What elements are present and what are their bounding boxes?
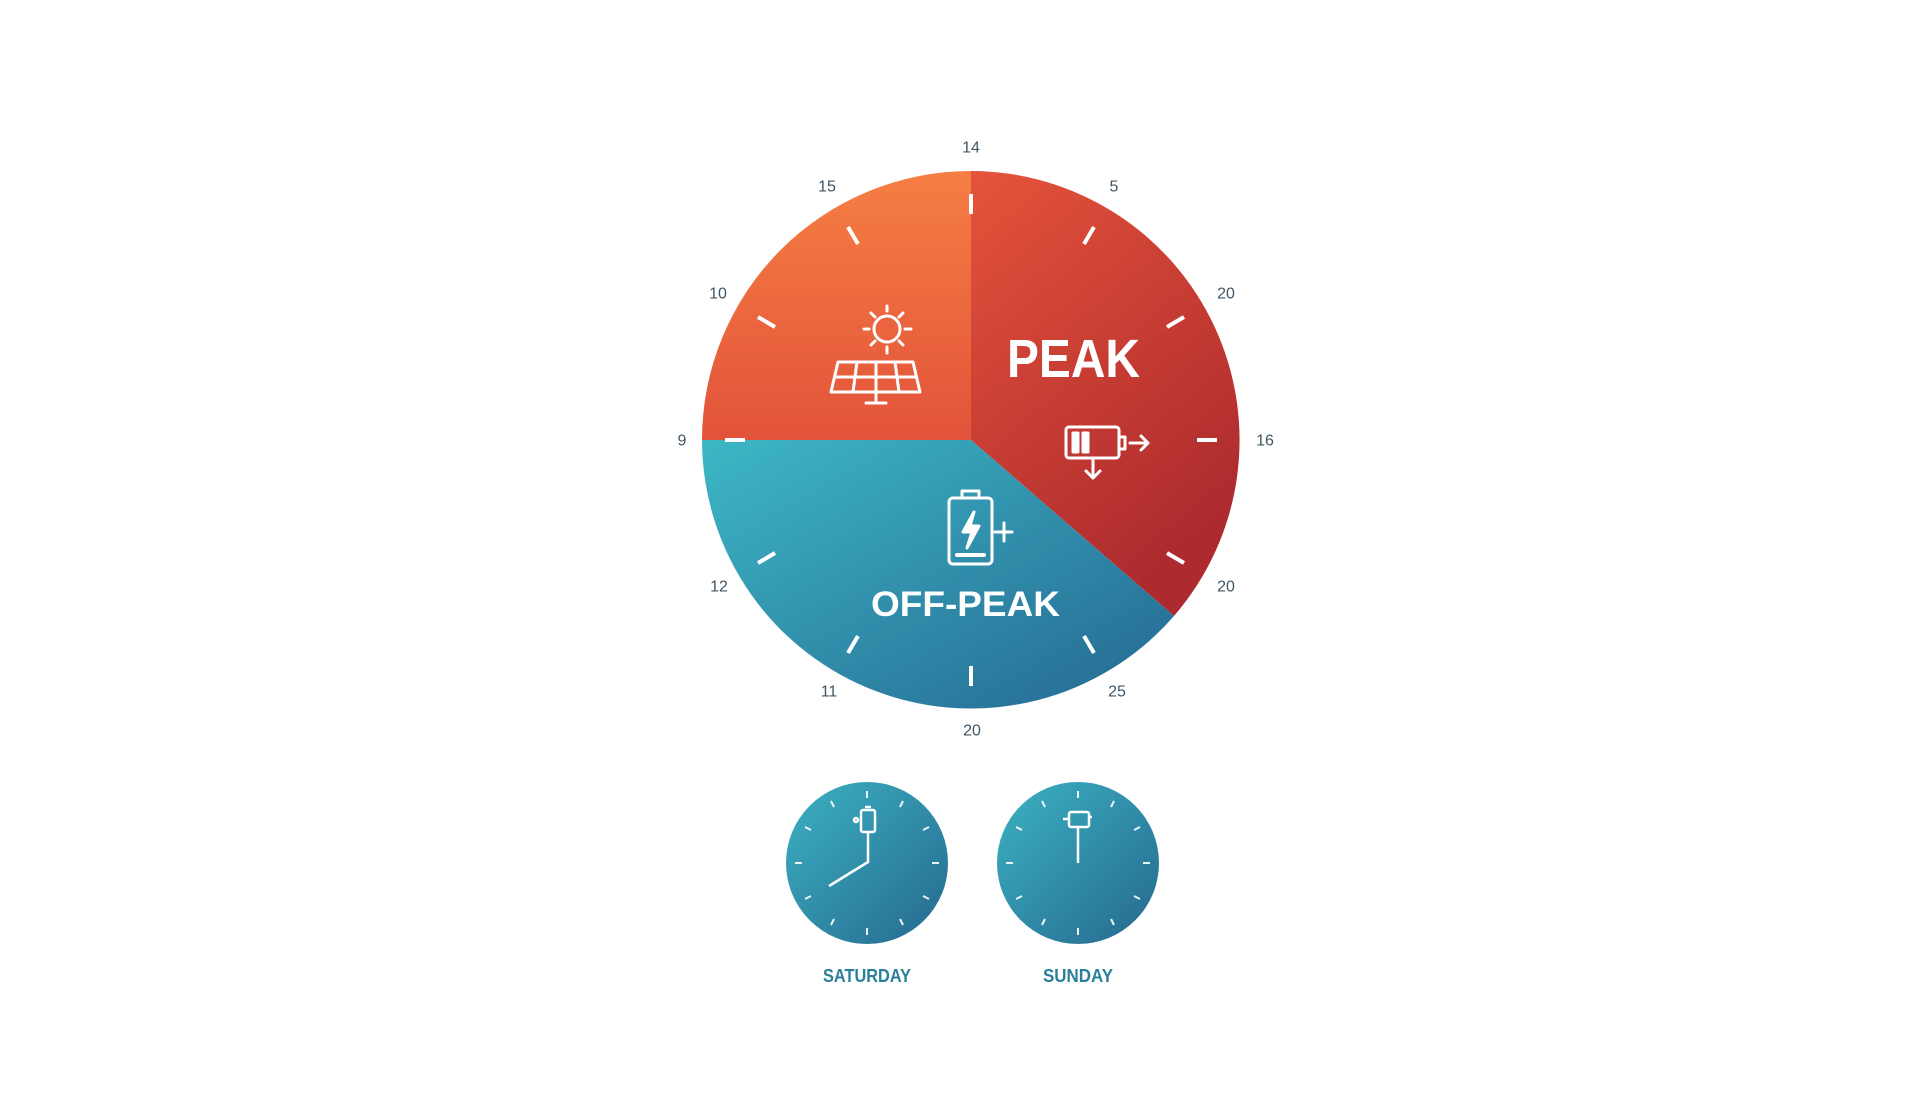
icon: discharging battery [1066,427,1148,478]
main clock [678,140,1274,740]
clock hands and battery icon [829,807,875,886]
dial labels: 25 [1108,684,1126,700]
clock hand and battery icon [1063,812,1092,863]
dial labels: 10 [709,286,727,302]
dial labels: 9 [678,432,687,450]
dial labels: 12 [710,578,728,596]
label: SATURDAY: SATURDAY [823,966,911,986]
dial labels: 14 [962,140,980,156]
dial labels: 20 [963,722,981,740]
dial labels [678,140,1274,740]
dial labels: 16 [1256,432,1274,450]
OFF-PEAK label: OFF-PEAK [871,585,1060,624]
clock: saturday [786,782,948,986]
dial labels: 11 [821,684,837,700]
dial labels: 5 [1110,178,1119,196]
segment: off-peak [702,440,1174,709]
icon: charging battery [949,491,1012,564]
segment: peak [971,171,1240,616]
tick marks [725,194,1217,686]
PEAK label: PEAK [1007,329,1140,389]
dial labels: 20 [1217,286,1235,302]
icon: sun and solar panel [831,306,920,403]
dial labels: 20 [1217,578,1235,596]
segment: solar (top-left) [702,171,971,440]
clock: sunday [997,782,1159,986]
label: SUNDAY: SUNDAY [1043,966,1113,986]
dial labels: 15 [818,178,836,196]
